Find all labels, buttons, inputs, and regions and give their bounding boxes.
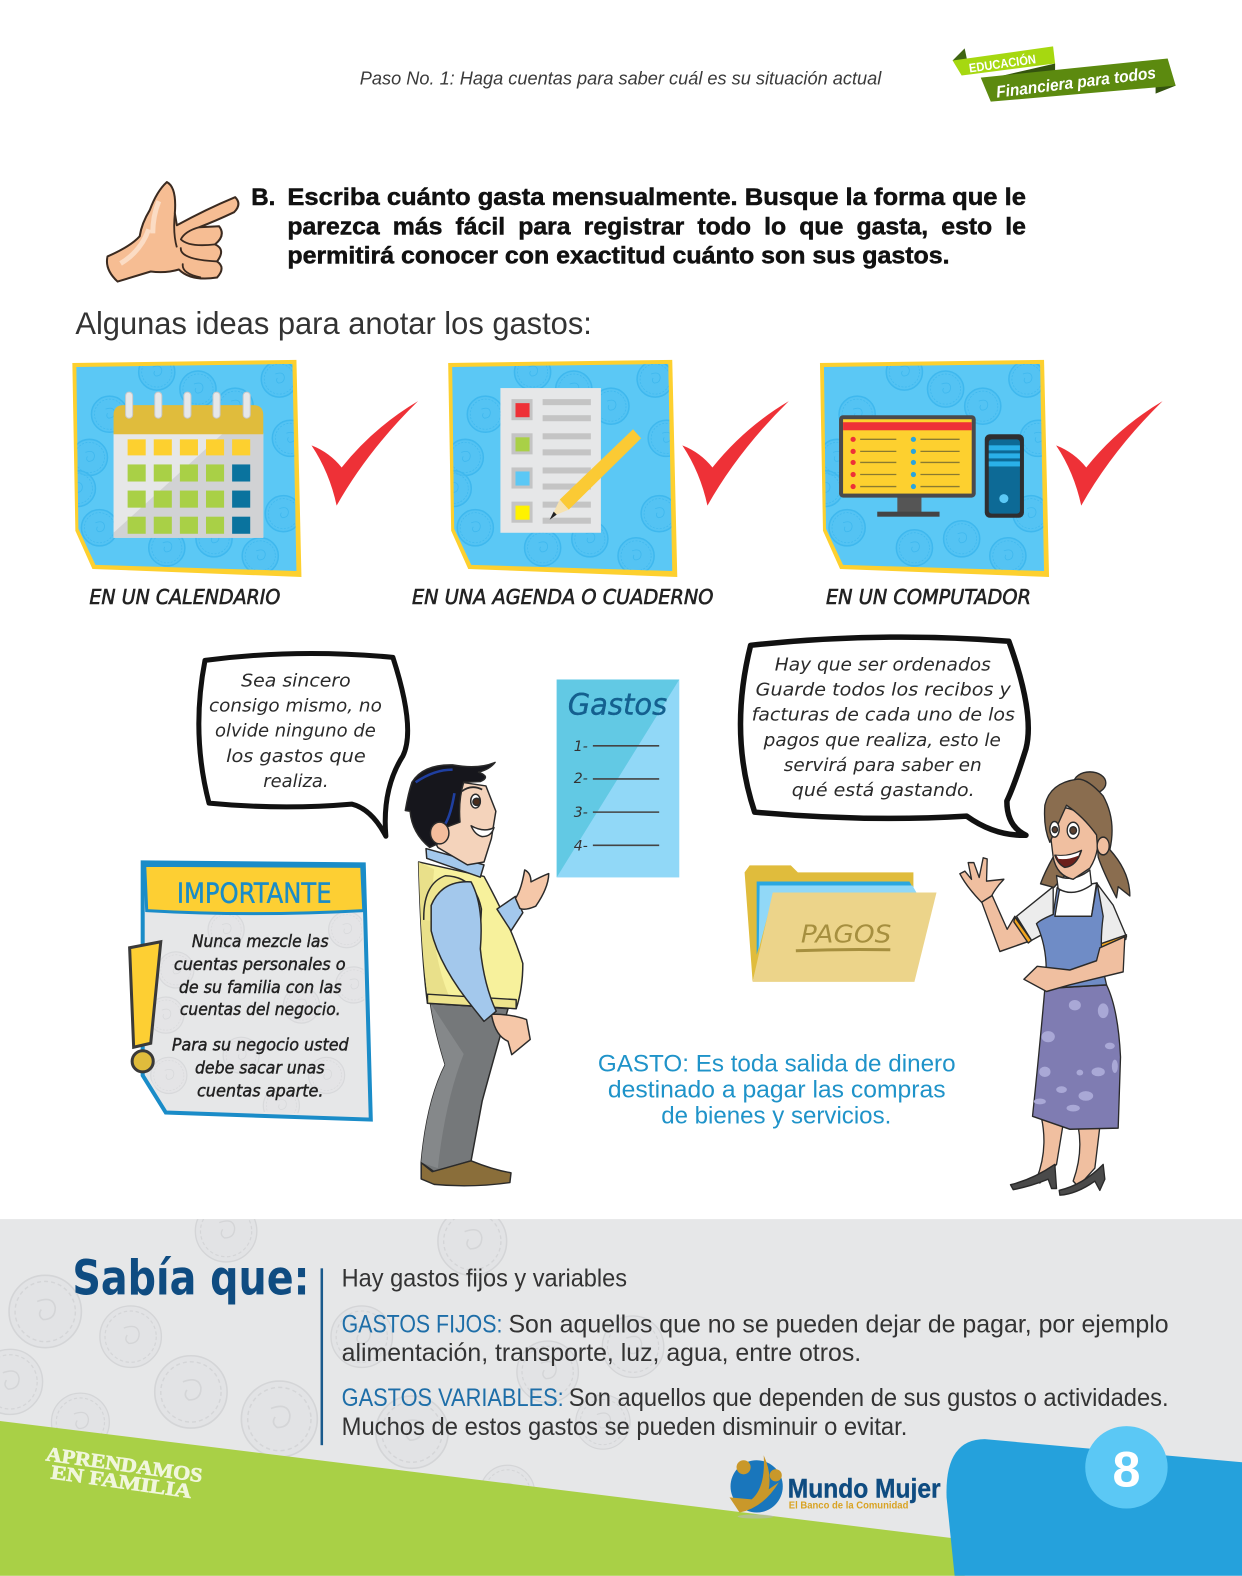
importante callout: cuentas aparte. <box>197 1081 324 1100</box>
definition: gasto <box>598 1050 956 1130</box>
gastos list sheet: 2- <box>574 771 588 787</box>
speech bubble: man <box>199 653 408 836</box>
speech bubble: woman: pagos que realiza, esto le <box>763 731 1001 751</box>
text block: gastos fijos y variables: GASTOS FIJOS: <box>342 1311 502 1339</box>
importante callout: cuentas personales o <box>174 955 346 974</box>
aprendamos en familia label <box>45 1443 204 1503</box>
icon: desktop computer <box>839 415 1024 518</box>
icon: checklist and pencil <box>500 388 641 533</box>
folder labelled pagos <box>745 865 937 982</box>
speech bubble: man: Sea sincero <box>241 672 351 692</box>
definition: gasto: destinado a pagar las compras <box>608 1076 946 1103</box>
definition: gasto: GASTO: Es toda salida de dinero <box>598 1050 956 1077</box>
ribbon logo: Educación Financiera para todos: Financiera para todos <box>995 63 1157 102</box>
speech bubble: man: olvide ninguno de <box>215 722 376 742</box>
instruction B: permitirá conocer con exactitud cuánto son sus gastos. <box>287 242 950 269</box>
importante callout: IMPORTANTE <box>177 879 332 910</box>
importante callout: Nunca mezcle las <box>192 932 329 951</box>
gastos list sheet: 1- <box>574 739 588 755</box>
importante callout <box>130 862 372 1124</box>
speech bubble: man: realiza. <box>263 772 329 792</box>
gastos list sheet: 3- <box>574 805 588 821</box>
icon: calendar <box>114 392 263 538</box>
panel: notebook <box>448 360 678 577</box>
text block: gastos fijos y variables: Muchos de estos gastos se pueden disminuir o evitar. <box>342 1413 907 1441</box>
ribbon logo: Educación Financiera para todos: EDUCACIÓN <box>968 51 1037 76</box>
subheading: Algunas ideas para anotar los gastos: <box>75 306 592 341</box>
text block: gastos fijos y variables: Son aquellos que no se pueden dejar de pagar, por ejemplo <box>508 1311 1169 1339</box>
page number badge <box>1085 1426 1168 1508</box>
logo: mundo mujer: Mundo Mujer <box>788 1472 941 1503</box>
speech bubble: woman: servirá para saber en <box>784 756 982 776</box>
icon: exclamation mark <box>130 942 161 1072</box>
caption: computer: EN UN COMPUTADOR <box>826 585 1031 609</box>
speech bubble: woman: facturas de cada uno de los <box>752 706 1015 726</box>
aprendamos en familia label: APRENDAMOS <box>45 1443 204 1487</box>
speech bubble: woman: Hay que ser ordenados <box>775 655 991 675</box>
character: man <box>405 762 549 1186</box>
text block: gastos fijos y variables: GASTOS VARIABLES: <box>342 1384 564 1412</box>
instruction B <box>251 184 1026 269</box>
speech bubble: man: los gastos que <box>226 747 366 767</box>
red check mark 1 <box>312 401 418 506</box>
ribbon logo: Educación Financiera para todos <box>953 46 1176 102</box>
caption: calendar: EN UN CALENDARIO <box>89 585 280 609</box>
gastos list sheet <box>557 679 679 877</box>
red check mark 2 <box>682 401 789 506</box>
logo: mundo mujer: El Banco de la Comunidad <box>789 1499 908 1511</box>
importante callout: cuentas del negocio. <box>180 1000 341 1019</box>
instruction B: B. <box>251 184 275 211</box>
folder labelled pagos: PAGOS <box>801 920 891 949</box>
importante callout: debe sacar unas <box>195 1058 325 1077</box>
importante callout: Para su negocio usted <box>172 1035 349 1054</box>
panel: sabia que background <box>0 1219 1242 1538</box>
aprendamos en familia label: EN FAMILIA <box>50 1462 193 1503</box>
blue corner block with page number <box>946 1426 1242 1576</box>
heading: sabia que: Sabía que: <box>72 1250 309 1306</box>
speech bubble: woman: Guarde todos los recibos y <box>756 681 1012 701</box>
definition: gasto: de bienes y servicios. <box>661 1103 891 1130</box>
speech bubble: man: consigo mismo, no <box>209 697 382 717</box>
instruction B: Escriba cuánto gasta mensualmente. Busque la forma que le <box>287 184 1026 211</box>
red check mark 3 <box>1056 401 1163 506</box>
page header text: Paso No. 1: Haga cuentas para saber cuál es su situación actual <box>360 69 882 89</box>
text block: gastos fijos y variables: alimentación, transporte, luz, agua, entre otros. <box>342 1339 861 1367</box>
page number badge: 8 <box>1112 1441 1140 1497</box>
character: woman <box>960 772 1130 1195</box>
text block: gastos fijos y variables <box>321 1264 1169 1445</box>
text block: gastos fijos y variables: Hay gastos fijos y variables <box>342 1264 627 1292</box>
text block: gastos fijos y variables: Son aquellos que dependen de sus gustos o actividades. <box>569 1384 1169 1412</box>
green footer wedge <box>0 1421 965 1576</box>
icon: pointing hand <box>107 182 238 282</box>
logo: mundo mujer <box>730 1455 941 1519</box>
panel: computer <box>820 360 1050 577</box>
speech bubble: woman <box>740 637 1028 835</box>
importante callout: de su familia con las <box>179 978 342 997</box>
gastos list sheet: 4- <box>574 838 588 854</box>
speech bubble: woman: qué está gastando. <box>792 781 975 801</box>
gastos list sheet: Gastos <box>568 688 667 722</box>
instruction B: parezca más fácil para registrar todo lo que gasta, esto le <box>287 213 1026 240</box>
panel: calendar <box>72 360 302 577</box>
caption: notebook: EN UNA AGENDA O CUADERNO <box>412 585 713 609</box>
